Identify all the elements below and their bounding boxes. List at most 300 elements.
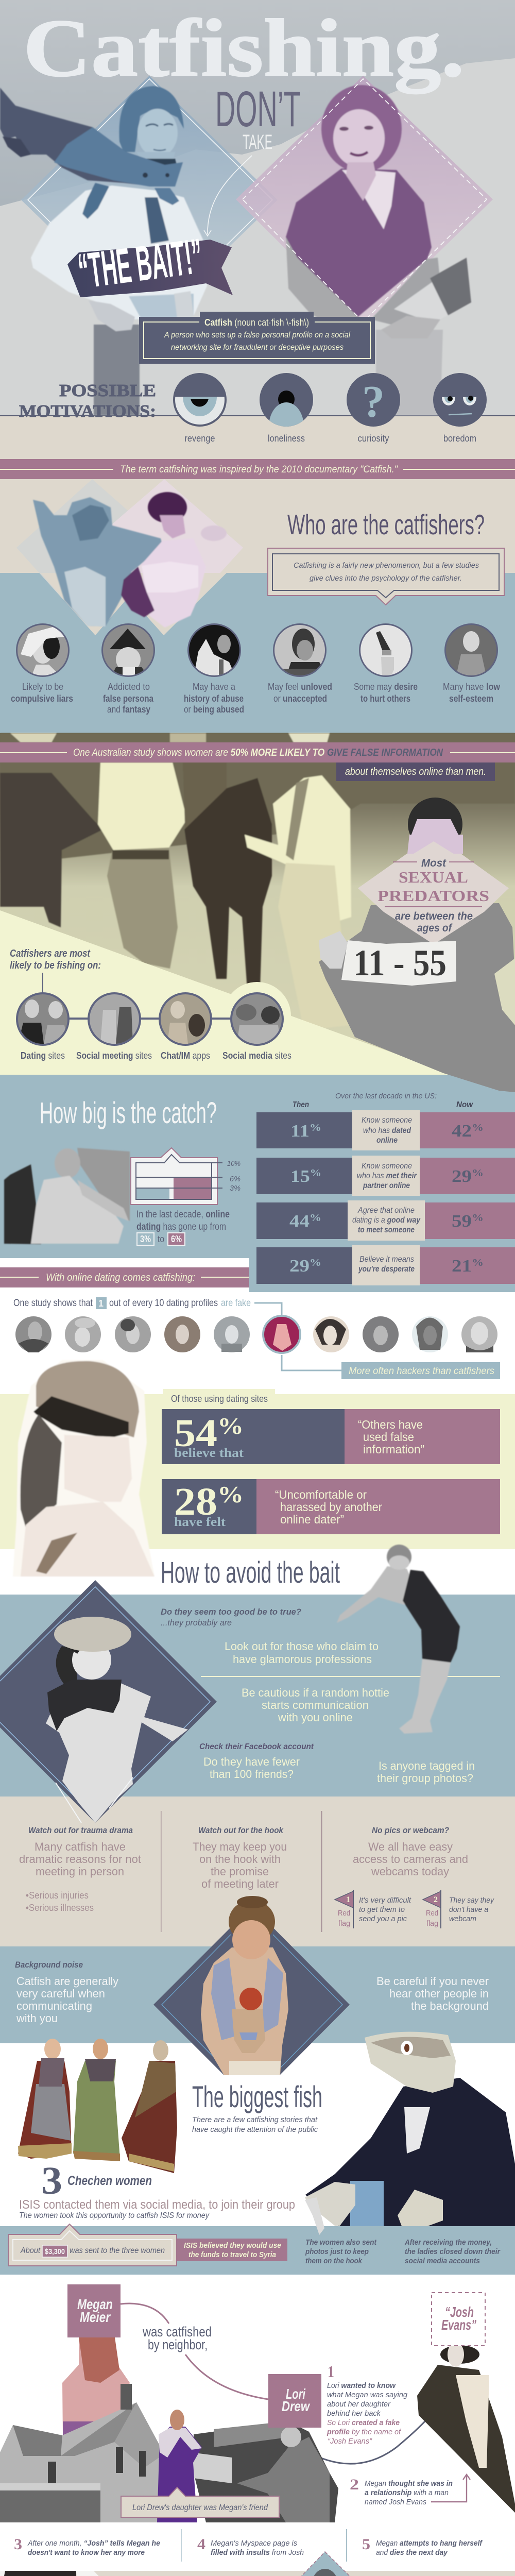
stat: 28% felt: harassed by another [280, 1500, 382, 1514]
stat: 28% felt: 28 [174, 1480, 213, 1523]
step 4: filled with insults from Josh [211, 2548, 304, 2557]
profile portraits [15, 1316, 497, 1353]
red flag 1 [335, 1890, 411, 1928]
story: 3 Chechen women: The women took this opportunity to catfish ISIS for money [19, 2211, 210, 2220]
box: Lori Drew: Drew [282, 2398, 311, 2414]
panel: 1 in 10 fake profiles [13, 1297, 500, 1379]
illustration: house [0, 2384, 165, 2522]
box: Megan Meier: Megan [77, 2296, 113, 2312]
column: trauma drama [19, 1825, 141, 1913]
red flag 1: It's very difficult [359, 1896, 411, 1905]
story: 3 Chechen women: Chechen women [67, 2174, 152, 2188]
heading: possible motivations: POSSIBLE [59, 381, 156, 400]
column: no pics: No pics or webcam? [372, 1825, 450, 1835]
text: glamorous professions: Look out for those who claim to [225, 1640, 379, 1653]
red flag 1: Red [338, 1909, 350, 1918]
row: good way to meet: % [472, 1212, 484, 1224]
row: dated online: 11 [290, 1122, 307, 1141]
row: met partner online: % [310, 1167, 321, 1179]
text: one study: out of every 10 dating profiles [109, 1298, 218, 1309]
text: closed accounts: social media accounts [405, 2257, 480, 2265]
banner: the bait: “THE BAIT!” [75, 228, 206, 299]
stat: 28% felt: “Uncomfortable or [275, 1488, 367, 1501]
step 1: “Josh Evans” [328, 2437, 372, 2446]
text: random hottie: Be cautious if a random hottie [242, 1686, 389, 1699]
trait: low self-esteem: Many have low [443, 682, 501, 692]
panel: Megan Meier story [0, 2284, 515, 2562]
panel: header hero [0, 2, 493, 415]
icon: curiosity [347, 373, 400, 444]
text: glamorous professions [225, 1640, 379, 1666]
red flag 1: send you a pic [359, 1914, 407, 1923]
trait: compulsive liars [11, 623, 73, 704]
dashed box: Josh Evans: Evans” [441, 2317, 476, 2333]
red flag 2 [423, 1890, 494, 1928]
stat: 54% believe: information” [363, 1443, 424, 1456]
heading: the biggest fish: The biggest fish [192, 2080, 322, 2114]
text: online dating from 3% to 6% [136, 1209, 230, 1245]
text: people in background: the background [411, 1999, 489, 2012]
text: facebook account: Is anyone tagged in [379, 1759, 475, 1772]
text: was catfished [142, 2324, 212, 2352]
stat: 54% believe [162, 1409, 500, 1464]
row: met partner online: % [472, 1167, 484, 1179]
platform: dating sites: Dating sites [21, 1050, 65, 1061]
callout: $3,300 [8, 2224, 177, 2266]
row: desperate: 29 [289, 1257, 307, 1276]
step 1: So Lori created a fake [327, 2418, 400, 2427]
story: 3 Chechen women: 3 [41, 2159, 62, 2202]
text: sent photos [305, 2238, 377, 2265]
step 1: Lori wanted to know [327, 2381, 396, 2390]
heading: How to avoid the bait [161, 1556, 340, 1589]
row: good way to meet: Agree that online [357, 1206, 415, 1215]
step 1: profile by the name of [327, 2428, 402, 2436]
stat: 28% felt [162, 1479, 500, 1534]
callout: daughter friend: Lori Drew's daughter was Megan's friend [132, 2503, 268, 2512]
heading: the biggest fish [192, 2080, 322, 2134]
connector lines [42, 973, 257, 1020]
text: glamorous professions: have glamorous professions [233, 1653, 372, 1666]
step 2 with arrow: 2 [350, 2476, 359, 2493]
stat: 54% believe: “Others have [358, 1418, 423, 1431]
box: about themselves [336, 762, 495, 781]
red flag 2: don't have a [449, 1905, 488, 1914]
text: facebook account: Check their Facebook account [199, 1742, 314, 1751]
connector curves [121, 2303, 437, 2464]
hexagon: sexual predators [358, 841, 509, 944]
text: careful communicating: communicating [16, 1999, 92, 2012]
sign: ages 11-55: 11 - 55 [353, 942, 447, 984]
callout: new phenomenon: Catfishing is a fairly new phenomenon, but a few studies [294, 561, 479, 570]
head of predator [407, 798, 463, 854]
chart: online dating growth [131, 1148, 241, 1205]
row: good way to meet: % [310, 1212, 321, 1224]
text: one study: One study shows that [13, 1298, 93, 1309]
text: people in background: hear other people in [389, 1987, 489, 2000]
callout: hackers: More often hackers than catfishers [349, 1366, 494, 1377]
step 3: After one month, “Josh” tells Megan he [27, 2539, 160, 2548]
icon: revenge eye: revenge [184, 433, 215, 444]
box: funds to Syria: the funds to travel to Syria [188, 2250, 276, 2259]
column: trauma drama: Many catfish have [35, 1840, 126, 1853]
column: no pics: access to cameras and [353, 1853, 468, 1866]
banner: comes catfishing: With online dating comes catfishing: [46, 1272, 195, 1283]
platform: chat apps: Chat/IM apps [161, 1050, 210, 1061]
row: met partner online [256, 1156, 515, 1196]
text: careful communicating: Catfish are generally [16, 1975, 118, 1988]
row: desperate: you're desperate [358, 1265, 415, 1274]
box: Megan Meier: Meier [80, 2309, 111, 2325]
trait: low self-esteem: self-esteem [449, 693, 493, 704]
column: no pics [353, 1825, 468, 1878]
row: desperate: Believe it means [359, 1255, 414, 1264]
illustration: fish-head gentleman [305, 2032, 515, 2235]
trait: desire to hurt [354, 623, 418, 704]
column: the hook: Watch out for the hook [198, 1825, 284, 1835]
stat: 54% believe: used false [363, 1430, 414, 1444]
platform: social media: Social media sites [222, 1050, 291, 1061]
hexagon: sexual predators: ages of [417, 922, 453, 934]
callout: daughter friend [121, 2487, 279, 2517]
trait: compulsive liars: compulsive liars [11, 693, 73, 704]
stat: 54% believe: % [217, 1413, 244, 1439]
panel: catfish definition: networking site for fraudulent or deceptive purposes [171, 343, 344, 352]
column: the hook: of meeting later [201, 1877, 279, 1890]
column: the hook: the promise [211, 1865, 269, 1878]
text: online dating from 3% to 6%: 3% [140, 1234, 151, 1244]
platform: chat apps [157, 992, 214, 1061]
diamonds with two figures [16, 479, 243, 635]
row: good way to meet [256, 1200, 515, 1241]
table heading: Now [456, 1100, 473, 1109]
heading: possible motivations: MOTIVATIONS: [19, 402, 156, 421]
platform: social meeting sites [76, 992, 152, 1061]
red flag 2: webcam [449, 1914, 476, 1923]
stat: 54% believe: 54 [174, 1412, 213, 1455]
text: careful communicating: with you [16, 2012, 58, 2025]
illustration: three Chechen women [18, 2039, 177, 2173]
diver woman [337, 1545, 460, 1734]
panel: catfish definition: A person who sets up a false personal profile on a social [164, 331, 350, 340]
text: facebook account: than 100 friends? [210, 1768, 294, 1781]
banner: term origin [0, 459, 515, 479]
column: no pics: We all have easy [368, 1840, 453, 1853]
trait: history of abuse [184, 623, 244, 715]
text: careful communicating [15, 1960, 118, 2025]
heading: possible motivations [19, 381, 156, 421]
step 4: Megan's Myspace page is [211, 2539, 297, 2548]
text: was catfished: was catfished [142, 2324, 212, 2340]
icon: boredom: boredom [443, 433, 476, 444]
stat: 28% felt: have felt [174, 1515, 226, 1529]
row: dated online: % [310, 1122, 321, 1133]
row: good way to meet: dating is a good way [352, 1216, 421, 1225]
woman with book [243, 79, 487, 415]
step 2 with arrow: Megan thought she was in [365, 2479, 453, 2488]
mauve diamond [236, 76, 493, 326]
text: random hottie [242, 1686, 389, 1724]
red flag 2: Red [426, 1909, 438, 1918]
table heading: Then [293, 1100, 309, 1109]
row: dated online: who has dated [363, 1126, 411, 1135]
row: good way to meet: to meet someone [358, 1226, 415, 1234]
step 1: 1 [328, 2362, 334, 2381]
hexagon: sexual predators: PREDATORS [377, 887, 489, 905]
chart: online dating growth: 10% [227, 1159, 241, 1168]
text: online dating from 3% to 6%: dating has gone up from [136, 1222, 226, 1232]
step 1 [327, 2362, 408, 2446]
red flag 2: They say they [449, 1896, 494, 1905]
trait: false persona: Addicted to [108, 682, 150, 692]
figure: Megan [62, 2337, 130, 2437]
trait: compulsive liars: Likely to be [22, 682, 63, 692]
photo: computer operator [4, 1148, 130, 1244]
callout: $3,300: $3,300 [45, 2247, 65, 2256]
step 2 with arrow: a relationship with a man [365, 2488, 449, 2497]
text: people in background: Be careful if you never [376, 1975, 489, 1988]
step 1: about her daughter [327, 2400, 391, 2409]
hexagon: sexual predators: are between the [395, 910, 473, 922]
column: the hook: They may keep you [193, 1840, 287, 1853]
red flag 1: 1 [346, 1895, 350, 1904]
blue diamond [21, 76, 278, 324]
text: facebook account: their group photos? [377, 1772, 473, 1785]
text: one study [13, 1297, 251, 1309]
figure: Josh Evans [417, 2342, 515, 2513]
heading: don't take [215, 81, 301, 154]
panel: background noise [15, 1896, 489, 2075]
text: sent photos: photos just to keep [305, 2247, 369, 2256]
row: dated online: online [376, 1136, 398, 1145]
step 5: Megan attempts to hang herself [376, 2539, 483, 2548]
icon: curiosity: curiosity [357, 433, 389, 444]
arrow: curved to bait [204, 156, 252, 236]
hexagon: sexual predators: SEXUAL [399, 868, 468, 886]
man with catfish [0, 86, 207, 415]
panel: catfish definition [139, 312, 375, 364]
column: trauma drama: dramatic reasons for not [19, 1853, 141, 1866]
red flag 2: 2 [434, 1895, 438, 1904]
stat: 28% felt: % [217, 1481, 244, 1507]
platform: dating sites [15, 992, 72, 1061]
cream wedge [0, 910, 453, 1075]
trait: false persona: and fantasy [107, 704, 150, 715]
trait: unloved [268, 623, 332, 704]
panel: the biggest fish [8, 2032, 515, 2266]
text: facebook account [199, 1742, 475, 1785]
platform: social media [222, 992, 291, 1061]
panel: Nev Schulman story [0, 2552, 506, 2576]
portrait: Nev [0, 2571, 116, 2576]
row: dated online: 42 [452, 1122, 469, 1141]
panel: catfish definition: Catfish (noun cat·fish \-fish\) [204, 317, 309, 328]
row: met partner online: 15 [290, 1167, 308, 1186]
banner: comes catfishing [0, 1267, 249, 1287]
title: Catfishing. [23, 2, 465, 94]
stat: 28% felt: online dater” [280, 1513, 344, 1526]
icon: revenge eye [173, 373, 227, 444]
heading: don't take: TAKE [243, 131, 272, 154]
column: the hook: on the hook with [199, 1853, 281, 1866]
box: about themselves: about themselves online than men. [345, 766, 486, 777]
trait: desire to hurt: Some may desire [354, 682, 418, 692]
panel: how big is the catch [0, 1092, 515, 1287]
row: desperate [256, 1245, 515, 1285]
step 2 with arrow [350, 2475, 470, 2506]
panel: fishing platforms [10, 948, 291, 1061]
row: dated online: Know someone [362, 1116, 412, 1125]
platform: social meeting sites: Social meeting sites [76, 1050, 152, 1061]
row: met partner online: partner online [363, 1181, 410, 1190]
box: funds to Syria: ISIS believed they would use [184, 2241, 281, 2250]
heading: don't take: DON’T [215, 81, 301, 137]
text: closed accounts: After receiving the money, [404, 2238, 492, 2247]
trait: low self-esteem [443, 623, 501, 704]
dashed box: Josh Evans: “Josh [445, 2304, 474, 2320]
trait: unloved: May feel unloved [268, 682, 332, 692]
text: was catfished: by neighbor, [148, 2337, 208, 2352]
panel: watch out columns [19, 1811, 494, 1932]
tab label: Of those using dating sites [171, 1394, 268, 1404]
panel: those using dating sites [162, 1389, 500, 1534]
text: closed accounts [404, 2238, 501, 2265]
row: met partner online: who has met their [357, 1172, 417, 1180]
column: trauma drama: •Serious injuries [26, 1890, 89, 1901]
callout: new phenomenon: give clues into the psychology of the catfisher. [310, 574, 462, 583]
step 5 [362, 2536, 483, 2557]
story: 3 Chechen women: ISIS contacted them via social media, to join their group [19, 2198, 295, 2212]
step 1: behind her back [327, 2409, 381, 2418]
row: desperate: % [310, 1257, 321, 1268]
text: too good to be true [161, 1607, 302, 1628]
trait: history of abuse: history of abuse [184, 693, 244, 704]
text: one study: 1 [98, 1298, 104, 1309]
stat: 54% believe: believe that [174, 1446, 244, 1460]
callout: $3,300: was sent to the three women [70, 2246, 165, 2255]
row: desperate: 21 [452, 1257, 469, 1276]
table heading: Over the last decade in the US: [335, 1092, 437, 1100]
step 5: 5 [362, 2536, 370, 2553]
text: online dating from 3% to 6%: to [158, 1234, 164, 1244]
column: trauma drama: Watch out for trauma drama [28, 1825, 133, 1835]
text: people in background [376, 1975, 489, 2012]
table heading [293, 1092, 473, 1109]
text: closed accounts: the ladies closed down their [405, 2247, 501, 2256]
figure: young woman in diamond [263, 2552, 356, 2576]
panel: who are the catfishers [11, 479, 504, 715]
text: online dating from 3% to 6%: 6% [171, 1234, 182, 1244]
tab label [163, 1389, 275, 1404]
row: dated online [256, 1110, 515, 1150]
column: no pics: webcams today [371, 1865, 449, 1878]
chart: online dating growth: 6% [230, 1175, 241, 1183]
step 4 [197, 2536, 304, 2557]
diamond with fur-stole woman [0, 1580, 217, 1823]
heading: the biggest fish: have caught the attention of the public [192, 2125, 318, 2134]
box: Lori Drew: Lori [286, 2386, 306, 2402]
box: funds to Syria [177, 2239, 287, 2261]
panel: possible motivations [19, 373, 487, 451]
divider line [201, 1676, 500, 1677]
trait: desire to hurt: to hurt others [360, 693, 410, 704]
text: too good to be true: Do they seem too good be to true? [161, 1607, 302, 1617]
sign: ages 11-55 [319, 931, 456, 986]
illustration: veiled woman [13, 1360, 154, 1577]
red flag 1: to get them to [359, 1905, 405, 1914]
horses and men [0, 733, 515, 1030]
row: good way to meet: 59 [452, 1212, 469, 1231]
icon: loneliness [260, 373, 313, 442]
step 3 [14, 2536, 160, 2557]
icon: curiosity: ? [362, 377, 385, 427]
connectors [254, 1303, 341, 1370]
step 3: 3 [14, 2536, 22, 2553]
step 1: what Megan was saying [327, 2391, 408, 2399]
text: random hottie: starts communication [262, 1699, 369, 1711]
text: too good to be true: ...they probably are [161, 1618, 232, 1628]
step 2 with arrow: named Josh Evans [365, 2498, 426, 2506]
column: trauma drama: •Serious illnesses [26, 1903, 94, 1913]
text: sent photos: them on the hook [305, 2257, 363, 2265]
man holding age sign [319, 903, 515, 1092]
row: met partner online: Know someone [362, 1162, 412, 1171]
row: good way to meet: 44 [289, 1212, 307, 1231]
chart: online dating growth: 3% [230, 1184, 241, 1193]
panel: sepia horse photo [0, 733, 515, 1092]
text: careful communicating: Background noise [15, 1960, 83, 1970]
row: desperate: % [472, 1257, 484, 1268]
text: random hottie: with you online [278, 1711, 353, 1724]
panel: how to avoid the bait [0, 1545, 500, 1823]
icon: boredom [433, 373, 487, 444]
banner: women give false info [0, 742, 515, 762]
banner: term origin: The term catfishing was inspired by the 2010 documentary "Catfish." [120, 464, 398, 475]
banner: women give false info: One Australian study shows women are 50% MORE LIKELY TO GIVE FALSE INFORMATION [73, 747, 443, 758]
trait: false persona [101, 623, 155, 715]
step 5: and dies the next day [376, 2548, 448, 2557]
figure: Lori at desk [191, 2421, 338, 2522]
dashed box: Josh Evans [432, 2293, 485, 2346]
step 3: doesn't want to know her any more [28, 2548, 145, 2557]
callout: hackers [341, 1362, 500, 1379]
heading: How big is the catch? [40, 1096, 217, 1130]
box: Megan Meier [67, 2284, 121, 2337]
red flag 1: flag [338, 1919, 350, 1928]
text: sent photos: The women also sent [305, 2238, 377, 2247]
box: Lori Drew [268, 2374, 321, 2428]
text: most likely to be fishing on: Catfishers are most [10, 948, 91, 959]
row: dated online: % [472, 1122, 484, 1133]
banner: the bait [67, 228, 233, 299]
step 4: 4 [197, 2536, 205, 2553]
text: careful communicating: very careful when [16, 1987, 105, 2000]
trait: history of abuse: May have a [193, 682, 236, 692]
text: most likely to be fishing on [10, 948, 101, 971]
story: 3 Chechen women [19, 2159, 295, 2220]
trait: false persona: false persona [103, 693, 154, 704]
trait: history of abuse: or being abused [184, 704, 244, 715]
heading: the biggest fish: There are a few catfishing stories that [192, 2115, 318, 2124]
callout: $3,300: About [20, 2246, 41, 2255]
hexagon: sexual predators: Most [421, 857, 447, 869]
row: met partner online: 29 [452, 1167, 469, 1186]
text: most likely to be fishing on: likely to be fishing on: [10, 960, 101, 971]
hexagon with painted woman [153, 1896, 350, 2075]
text: facebook account: Do they have fewer [203, 1755, 300, 1768]
text: one study: are fake [221, 1298, 251, 1309]
column: trauma drama: meeting in person [36, 1865, 124, 1878]
